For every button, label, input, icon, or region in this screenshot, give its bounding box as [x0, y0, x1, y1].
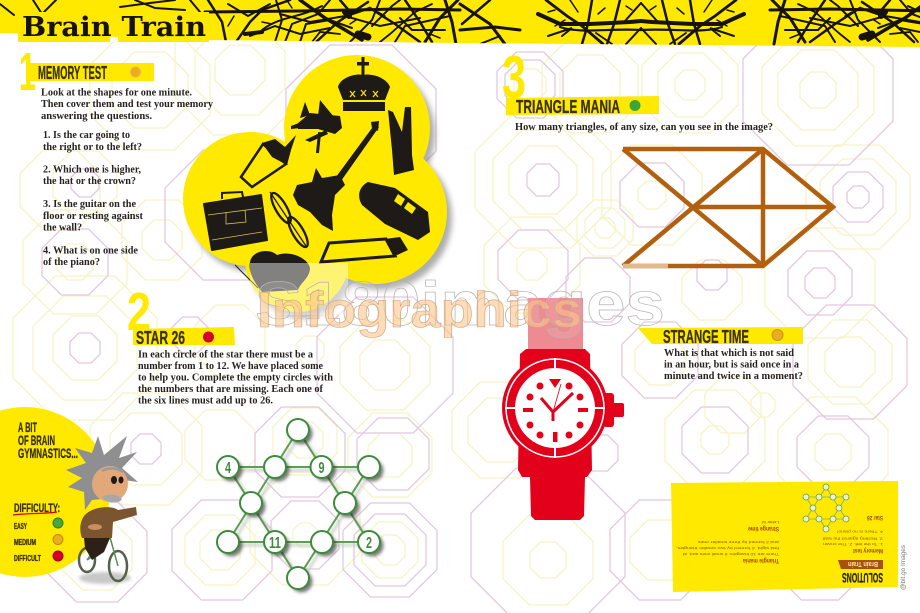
memory answers: 1. To the left. 2. The crown	[823, 542, 883, 547]
questions: 1. Is the car going to	[43, 130, 130, 141]
number 3: 3	[502, 44, 526, 111]
panel: strange time	[638, 327, 803, 382]
red wristwatch	[502, 298, 624, 520]
icon: crown	[338, 57, 390, 111]
header band with thorny branches	[0, 0, 920, 47]
side heading: A BIT	[18, 419, 37, 435]
panel: star 26	[127, 282, 333, 406]
strap bottom	[530, 477, 585, 520]
panel: memory test: 4. What is on one side	[43, 246, 139, 256]
icon: lantern	[241, 135, 296, 187]
panel: triangle mania	[502, 44, 833, 266]
panel: memory test: answering the questions.	[41, 111, 153, 122]
icon: glasses	[268, 191, 311, 249]
instructions: In each circle of the star there must be a	[138, 350, 313, 360]
panel: memory test: Then cover them and test your memory	[41, 99, 213, 110]
legend: DIFFICULTY:	[14, 501, 60, 515]
triangle answer: Triangle mania	[743, 557, 779, 564]
icon: briefcase	[204, 192, 267, 250]
solutions heading: SOLUTIONS	[842, 570, 883, 586]
legend: DIFFICULT	[14, 554, 41, 563]
strap top	[528, 298, 583, 354]
panel: strange time: STRANGE TIME	[663, 327, 749, 347]
panel: strange time: in an hour, but is said once in a	[664, 360, 799, 370]
triangle answer	[676, 540, 779, 564]
panel: star 26: the six lines must add up to 26.	[138, 396, 274, 406]
memory answers: 4. There is no piano!	[837, 530, 883, 534]
speech bubble with objects	[183, 55, 452, 318]
credit: @bit.go Images	[900, 544, 907, 590]
strange time answer	[748, 520, 779, 532]
panel: solutions (upside down)	[671, 481, 898, 592]
star answer title: Star 26	[867, 514, 883, 521]
heading bar	[133, 327, 235, 345]
brand tag	[838, 560, 883, 569]
triangle answer: There are 10 triangles: 6 small ones and, at	[682, 552, 779, 557]
intro text: Look at the shapes for one minute.	[41, 88, 193, 98]
panel: memory test: MEMORY TEST	[38, 63, 107, 83]
legend	[13, 501, 63, 563]
heading bar	[506, 96, 659, 115]
side heading: GYMNASTICS...	[18, 445, 78, 461]
icon: saw	[321, 237, 408, 262]
panel: star 26: number from 1 to 12. We have placed some	[138, 361, 324, 372]
brand tag: Brain Train	[848, 560, 878, 567]
title: Brain Train: Brain Train	[22, 12, 206, 43]
icon: pocket knife	[291, 100, 342, 153]
icon: vintage car	[359, 182, 430, 240]
dial markers	[523, 379, 588, 442]
icon: grand piano	[235, 251, 310, 292]
bicycle	[79, 530, 127, 581]
riddle: What is that which is not said	[664, 348, 794, 359]
panel: memory test: the right or to the left?	[43, 142, 142, 153]
panel: memory test: the hat or the crown?	[43, 176, 136, 187]
star puzzle: 4	[225, 460, 231, 477]
memory answers	[823, 530, 883, 554]
triangle answer: and 2 formed by three smaller ones	[698, 540, 779, 545]
body	[80, 507, 137, 538]
star puzzle: 9	[318, 460, 325, 477]
number 2: 2	[127, 282, 151, 342]
panel: star 26: to help you. Complete the empty circles with	[138, 372, 333, 384]
strange time answer: Letter M	[762, 520, 779, 525]
panel: memory test: floor or resting against	[43, 211, 144, 222]
number 1: 1	[19, 42, 36, 102]
case	[518, 349, 592, 477]
crown	[603, 393, 614, 427]
panel: strange time: minute and twice in a moment?	[664, 371, 803, 382]
panel: memory test: of the piano?	[43, 257, 100, 268]
star puzzle	[217, 419, 384, 592]
panel: memory test: 2. Which one is higher,	[43, 164, 141, 176]
panel: difficulty legend	[0, 407, 110, 577]
heading bar	[638, 327, 803, 344]
panel: star 26: the numbers that are missing. Each one of	[138, 384, 324, 395]
hands	[541, 393, 573, 421]
watermark: Infographics	[257, 282, 582, 338]
illustration: scientist on a bicycle	[66, 436, 138, 584]
mini star	[803, 484, 849, 532]
legend: MEDIUM	[14, 538, 36, 547]
memory answers: Memory test	[852, 547, 883, 554]
star puzzle: 11	[269, 535, 281, 552]
question: How many triangles, of any size, can you see in the image?	[515, 122, 773, 133]
triangle figure	[623, 149, 833, 266]
triangle answer: first sight, 4 formed by two smaller triangles,	[676, 546, 779, 551]
bezel	[502, 355, 608, 461]
face	[92, 466, 128, 502]
heading bar	[26, 63, 154, 81]
side heading: OF BRAIN	[18, 432, 55, 448]
legend: EASY	[14, 522, 27, 531]
watermark: S180images	[255, 270, 665, 339]
panel: memory test: 3. Is the guitar on the	[43, 199, 137, 210]
panel: triangle mania: TRIANGLE MANIA	[516, 97, 620, 117]
panel: memory test	[19, 42, 213, 268]
strange time answer: Strange time	[748, 525, 779, 532]
icon: guitar	[293, 121, 379, 231]
panel: memory test: the wall?	[43, 222, 82, 234]
star puzzle: 2	[366, 535, 372, 552]
panel: star 26: STAR 26	[136, 328, 185, 348]
memory answers: 3. Resting against the wall	[823, 536, 883, 542]
icon: clothes peg	[388, 107, 414, 175]
side heading	[18, 419, 78, 461]
hair	[66, 436, 138, 510]
